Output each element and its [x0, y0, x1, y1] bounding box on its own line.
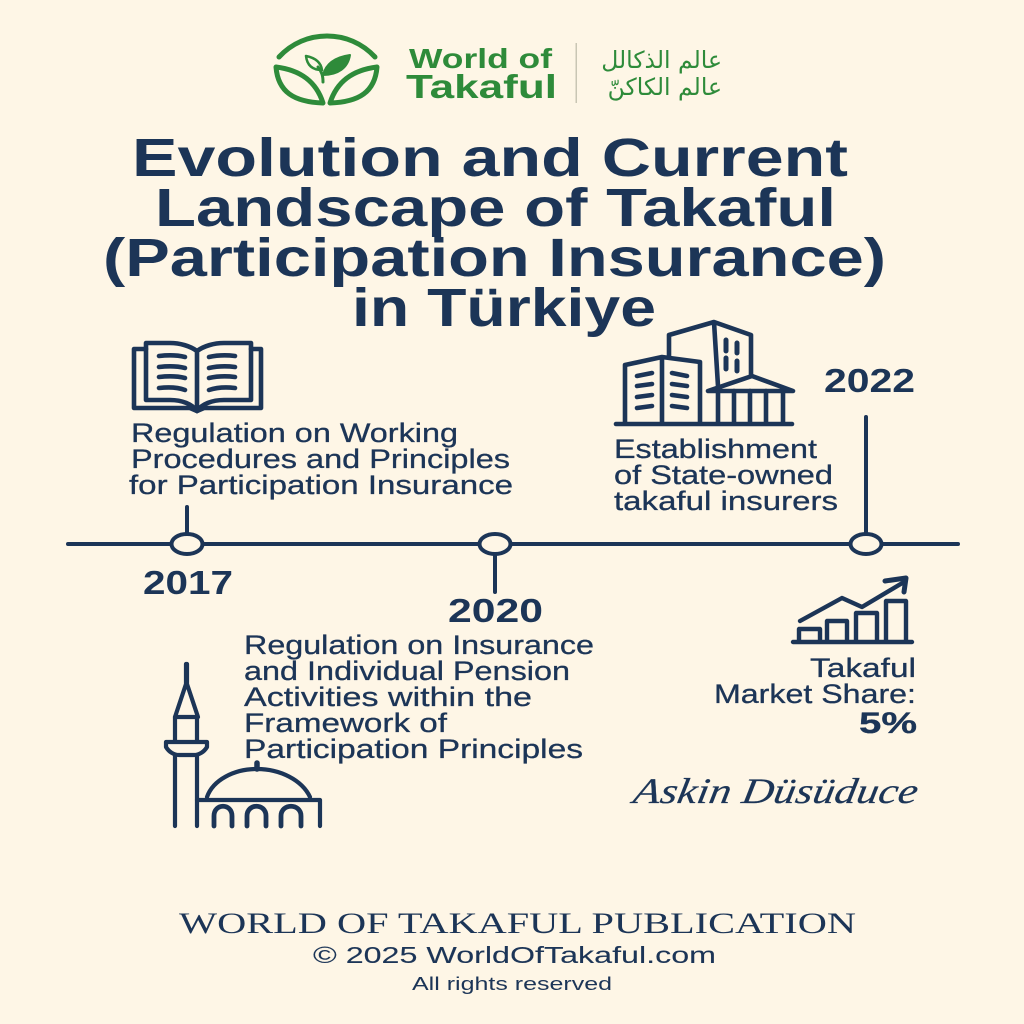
text: 2020 regulation: Regulation on Insurance — [244, 630, 594, 660]
timeline — [68, 417, 958, 592]
marker: 2022 — [850, 534, 882, 554]
icon: buildings — [616, 322, 793, 424]
text: 2017 regulation: Procedures and Principles — [131, 444, 510, 474]
text: 2017 regulation: for Participation Insurance — [129, 470, 513, 500]
title: Landscape of Takaful — [155, 178, 836, 238]
title: (Participation Insurance) — [103, 228, 886, 288]
text: state-owned insurers — [614, 434, 838, 516]
title — [103, 128, 886, 338]
text: state-owned insurers: takaful insurers — [614, 486, 838, 516]
text: 2020 regulation: Framework of — [244, 708, 448, 738]
text: 2020 regulation — [244, 630, 594, 764]
copyright: © 2025 WorldOfTakaful.com — [313, 942, 716, 968]
text: 2020 regulation: and Individual Pension — [244, 656, 570, 686]
logo — [276, 36, 722, 105]
title: Evolution and Current — [132, 128, 848, 188]
logo: عالم الكاكنّ — [608, 73, 722, 101]
text: takaful market share: Market Share: — [714, 679, 916, 709]
text: 2017 regulation — [129, 418, 513, 500]
icon: mosque — [166, 664, 320, 826]
brand name: World of — [409, 43, 553, 74]
footer — [179, 907, 856, 994]
year: 2020: 2020 — [448, 592, 543, 629]
marker: 2020 — [480, 534, 510, 554]
text: 2020 regulation: Participation Principles — [244, 734, 583, 764]
text: 2017 regulation: Regulation on Working — [131, 418, 458, 448]
text: takaful market share: Takaful — [810, 653, 916, 683]
signature: Askin Düsüduce — [628, 771, 922, 811]
icon: open book — [134, 343, 261, 411]
logo: Takaful — [406, 68, 557, 105]
icon: leaf emblem — [276, 36, 377, 103]
text: 2020 regulation: Activities within the — [244, 682, 532, 712]
text: state-owned insurers: of State-owned — [614, 460, 833, 490]
year: 2017: 2017 — [143, 564, 233, 601]
text: state-owned insurers: Establishment — [614, 434, 818, 464]
text: takaful market share: 5% — [859, 707, 917, 740]
rights: All rights reserved — [412, 974, 612, 994]
text: takaful market share — [714, 653, 917, 740]
arabic brand name: عالم الذكالل — [601, 46, 722, 74]
year: 2022: 2022 — [824, 362, 915, 399]
marker: 2017 — [172, 534, 202, 554]
title: in Türkiye — [352, 278, 656, 338]
publication name: WORLD OF TAKAFUL PUBLICATION — [179, 907, 856, 940]
icon: growth chart — [793, 578, 912, 642]
